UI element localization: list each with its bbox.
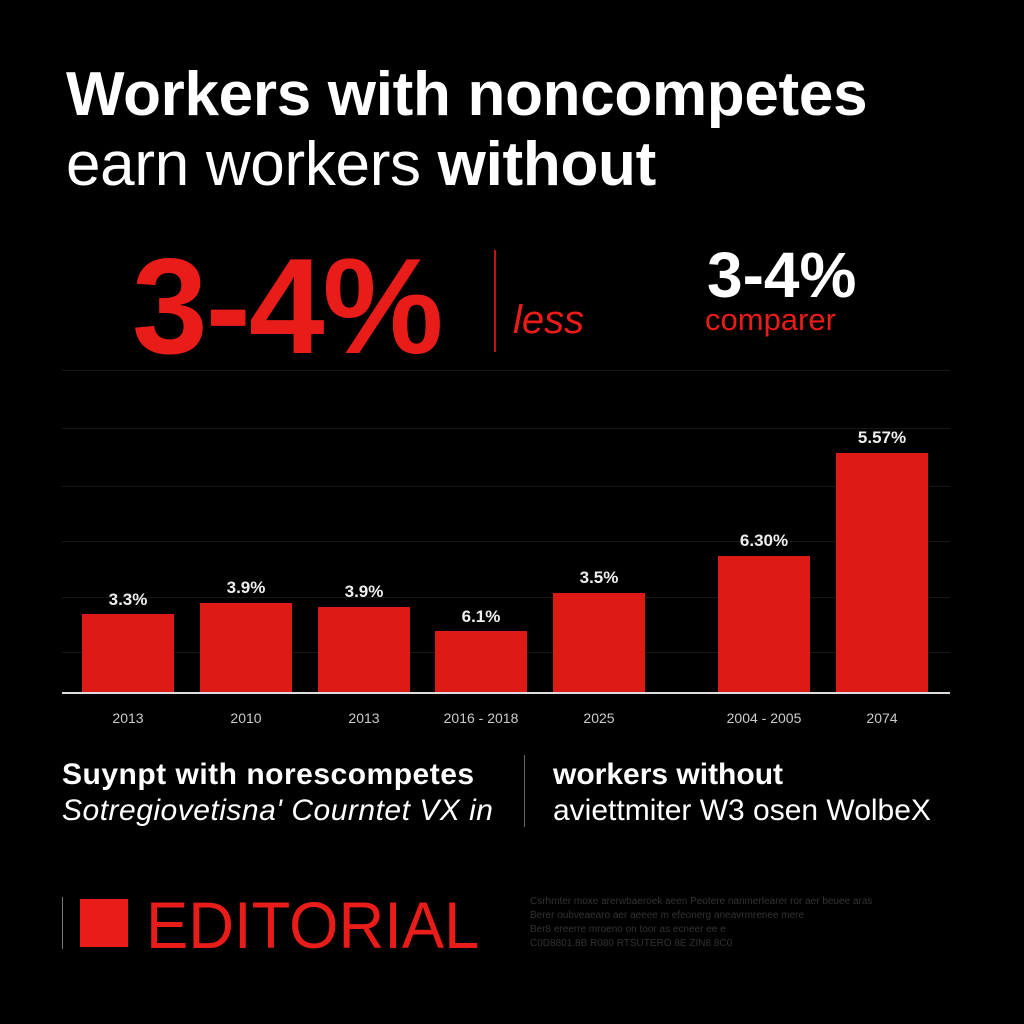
secondary stat (705, 239, 856, 337)
bottom text: left: Suynpt with norescompetes (62, 758, 475, 791)
bar chart: 2010 (230, 710, 262, 726)
bottom text: left (62, 758, 493, 827)
bar chart: 2013 (348, 710, 380, 726)
stat label: less (513, 298, 584, 342)
secondary number: 3-4% (707, 239, 856, 311)
bar chart: 6.1% (462, 607, 500, 626)
bar chart: 3.5% (580, 568, 618, 587)
title: Workers with noncompetes (66, 60, 867, 129)
fine print: C0D8801.8B R080 RTSUTERO 8E ZIN8 8C0 (530, 938, 732, 949)
secondary label: comparer (705, 302, 836, 337)
stat number: 3-4% (132, 230, 442, 382)
big stat: 3-4% less (132, 230, 584, 382)
bottom text: right (552, 758, 931, 827)
bar chart: 3.9% (345, 582, 383, 601)
fine print: Berer oubveaearo aer aeeee m efeonerg aneavrmrenee mere (530, 910, 804, 921)
bottom text: left: Sotregiovetisna' Courntet VX in (62, 794, 493, 827)
bar chart: 2025 (583, 710, 615, 726)
bar chart: 2013 (112, 710, 144, 726)
bar chart: 2016 - 2018 (444, 710, 518, 726)
bar chart: 3.9% (227, 578, 265, 597)
title (66, 60, 867, 199)
bottom text: right: aviettmiter W3 osen WolbeX (553, 794, 931, 827)
bar chart (62, 428, 950, 726)
fine print: Ber8 ereerre mroeno on toor as ecneer ee e (530, 924, 726, 935)
title: earn workers without (66, 130, 656, 199)
icon: red square (80, 899, 128, 947)
bar chart: 3.3% (109, 590, 147, 609)
bottom text: right: workers without (553, 758, 783, 791)
bar chart: 5.57% (858, 428, 906, 447)
bar chart: 2074 (866, 710, 898, 726)
fine print (530, 896, 872, 949)
bar chart: 2004 - 2005 (727, 710, 801, 726)
editorial logo: EDITORIAL (146, 888, 479, 962)
fine print: Csrhmter moxe arerwbaeroek aeen Peotere nanmerlearer ror aer beuee aras (530, 896, 872, 907)
bar chart: 6.30% (740, 531, 788, 550)
